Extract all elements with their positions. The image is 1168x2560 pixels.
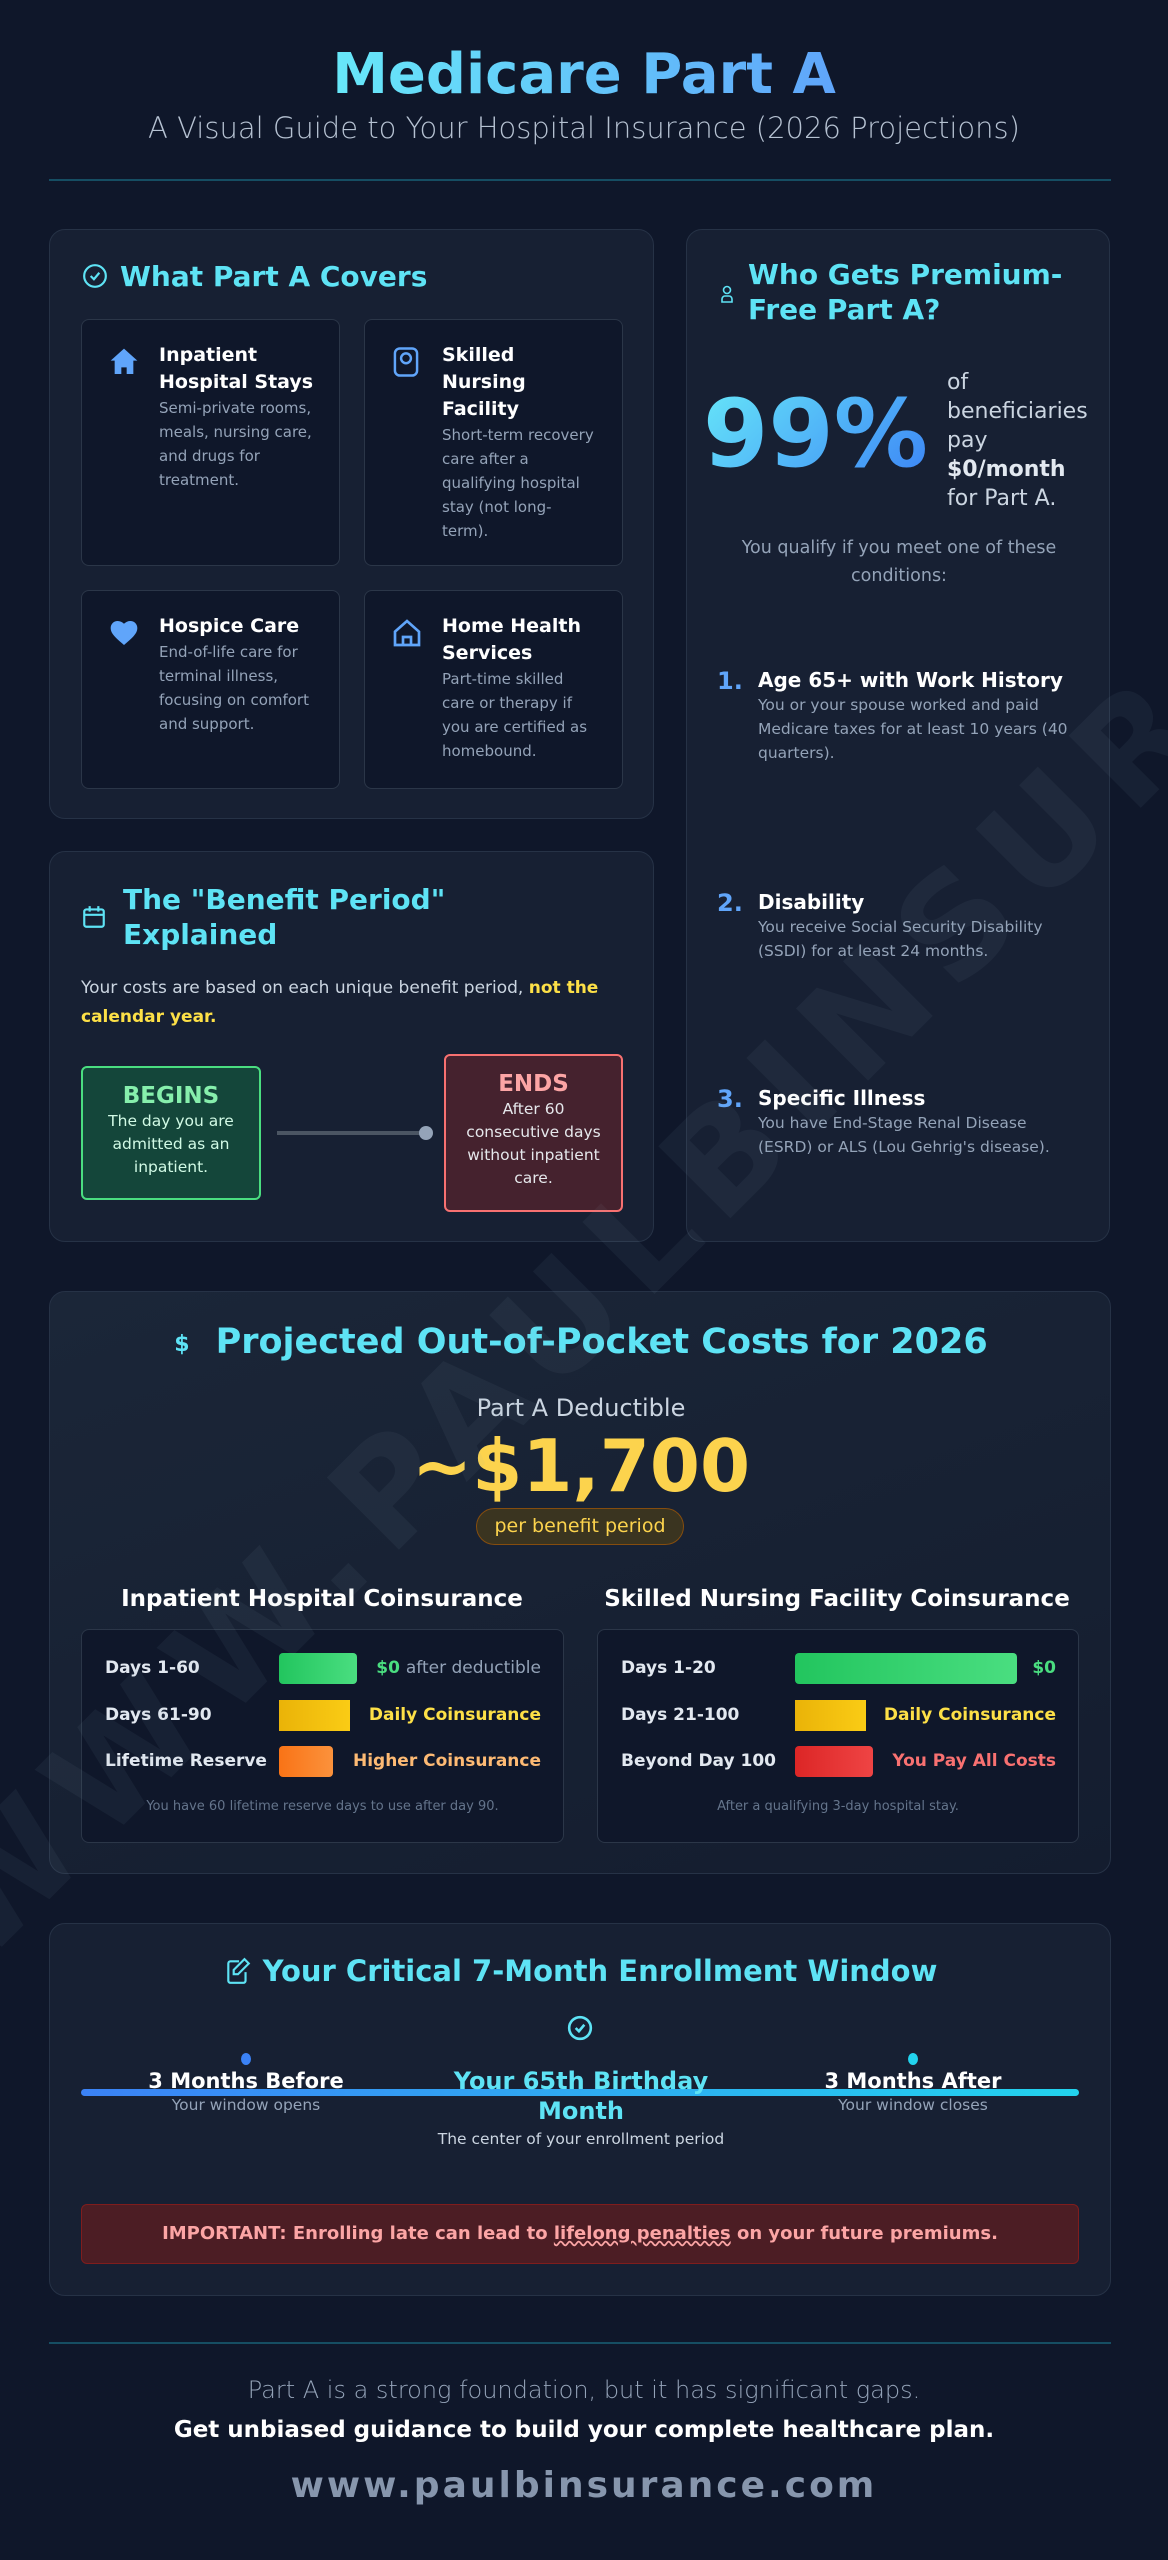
row: Days 61-90	[105, 1705, 212, 1725]
panel: who gets premium-free	[686, 229, 1110, 1242]
warning callout: IMPORTANT: Enrolling late can lead to lifelong penalties on your future premiums.	[162, 2223, 998, 2244]
item 1: 1.	[717, 667, 743, 695]
row: Beyond Day 100	[621, 1751, 776, 1771]
milestone: before: 3 Months Before	[148, 2069, 344, 2093]
table: inpatient	[81, 1629, 564, 1843]
item 2: You receive Social Security Disability (SSDI) for at least 24 months.	[758, 918, 1042, 960]
row: You Pay All Costs	[892, 1751, 1056, 1771]
icon: person	[721, 286, 733, 303]
row	[105, 1700, 541, 1731]
row: Days 1-60	[105, 1658, 200, 1678]
row: $0	[1032, 1658, 1056, 1678]
milestone: before	[148, 2069, 344, 2114]
warning callout	[81, 2204, 1079, 2264]
subheading: SNF: Skilled Nursing Facility Coinsurance	[604, 1586, 1070, 1612]
card: home health	[364, 590, 623, 789]
footnote: You have 60 lifetime reserve days to use after day 90.	[146, 1799, 499, 1814]
row: Days 1-20	[621, 1658, 716, 1678]
item 3: You have End-Stage Renal Disease (ESRD) or ALS (Lou Gehrig's disease).	[758, 1114, 1050, 1156]
item 3	[717, 1085, 1050, 1156]
milestone: before: Your window opens	[172, 2096, 320, 2114]
box: ends: ENDS	[498, 1071, 569, 1097]
row: Daily Coinsurance	[369, 1705, 541, 1725]
deductible label: Part A Deductible	[477, 1394, 685, 1422]
card: hospice: Hospice Care	[159, 615, 299, 637]
heading: enrollment: Your Critical 7-Month Enrollment Window	[263, 1954, 937, 1988]
heading: benefit: The "Benefit Period" Explained	[123, 883, 445, 951]
paragraph: Your costs are based on each unique benefit period, not the calendar year.	[81, 978, 598, 1027]
item 2: 2.	[717, 889, 743, 917]
subheading: inpatient: Inpatient Hospital Coinsurance	[121, 1586, 523, 1612]
row: Lifetime Reserve	[105, 1751, 267, 1771]
pill: per benefit period	[494, 1515, 666, 1537]
box: begins: The day you are admitted as an inpatient.	[108, 1112, 234, 1176]
pill	[476, 1508, 684, 1545]
website url: www.paulbinsurance.com	[291, 2465, 877, 2506]
row: $0 after deductible	[376, 1658, 541, 1678]
milestone: birthday	[438, 2067, 724, 2148]
arrow connector	[277, 1131, 429, 1135]
deductible amount: ~$1,700	[412, 1424, 750, 1508]
heading: covers: What Part A Covers	[120, 260, 427, 293]
icon: check	[568, 2016, 592, 2040]
row: Daily Coinsurance	[884, 1705, 1056, 1725]
row	[105, 1653, 541, 1684]
milestone: birthday: The center of your enrollment period	[438, 2130, 724, 2148]
dots	[241, 2053, 251, 2065]
panel: out-of-pocket costs	[49, 1291, 1111, 1874]
item 1: You or your spouse worked and paid Medicare taxes for at least 10 years (40 quarters).	[758, 696, 1068, 762]
heading: who: Who Gets Premium-Free Part A?	[748, 258, 1062, 326]
milestone: after	[824, 2069, 1002, 2114]
item 3: Specific Illness	[758, 1086, 925, 1110]
card: skilled nursing: Short-term recovery care after a qualifying hospital stay (not long-term).	[442, 426, 594, 540]
milestone: after: 3 Months After	[824, 2069, 1002, 2093]
stat text	[947, 370, 1088, 511]
card: home health: Home Health Services	[442, 615, 581, 664]
item 3: 3.	[717, 1085, 743, 1113]
footer text: Part A is a strong foundation, but it has significant gaps.	[248, 2376, 920, 2404]
table: SNF	[597, 1629, 1079, 1843]
timeline line	[81, 2089, 1079, 2096]
stat text: beneficiaries	[947, 399, 1088, 424]
stat text: of	[947, 370, 968, 395]
stat text: $0/month	[947, 457, 1066, 482]
card: skilled nursing: Skilled Nursing Facility	[442, 344, 526, 420]
card: hospice	[81, 590, 340, 789]
item 1: Age 65+ with Work History	[758, 668, 1063, 692]
subtitle: A Visual Guide to Your Hospital Insurance (2026 Projections)	[148, 111, 1020, 145]
box: ends	[444, 1054, 623, 1212]
panel: benefit period	[49, 851, 654, 1242]
icon: calendar	[83, 906, 105, 928]
footer text	[174, 2376, 994, 2443]
milestone: birthday: Month	[538, 2097, 624, 2125]
row: Days 21-100	[621, 1705, 739, 1725]
item 1	[717, 667, 1068, 762]
row: Higher Coinsurance	[353, 1751, 541, 1771]
card: skilled nursing	[364, 319, 623, 566]
box: begins: BEGINS	[123, 1083, 219, 1109]
panel: what part A covers	[49, 229, 654, 819]
item 2: Disability	[758, 890, 864, 914]
footer text: Get unbiased guidance to build your complete healthcare plan.	[174, 2417, 994, 2443]
stat text: for Part A.	[947, 486, 1056, 511]
card: hospice: End-of-life care for terminal illness, focusing on comfort and support.	[159, 643, 309, 733]
item 2	[717, 889, 1042, 960]
footnote: After a qualifying 3-day hospital stay.	[717, 1799, 959, 1814]
heading: costs: $ Projected Out-of-Pocket Costs for 2026	[174, 1322, 988, 1362]
stat text: pay	[947, 428, 987, 453]
row	[621, 1653, 1056, 1684]
qualify text: You qualify if you meet one of these conditions:	[742, 538, 1056, 586]
row	[621, 1746, 1056, 1777]
row	[621, 1700, 1056, 1731]
milestone: after: Your window closes	[838, 2096, 988, 2114]
card: home health: Part-time skilled care or therapy if you are certified as homebound.	[442, 670, 587, 760]
panel: enrollment window	[49, 1923, 1111, 2296]
card: inpatient	[81, 319, 340, 566]
row	[105, 1746, 541, 1777]
milestone: birthday: Your 65th Birthday	[454, 2067, 708, 2095]
card: inpatient: Semi-private rooms, meals, nursing care, and drugs for treatment.	[159, 399, 312, 489]
card: inpatient: Inpatient Hospital Stays	[159, 344, 313, 393]
box: ends: After 60 consecutive days without inpatient care.	[466, 1100, 601, 1187]
box: begins	[81, 1066, 261, 1200]
stat 99%: 99%	[703, 380, 928, 489]
title: Medicare Part A	[332, 42, 836, 107]
